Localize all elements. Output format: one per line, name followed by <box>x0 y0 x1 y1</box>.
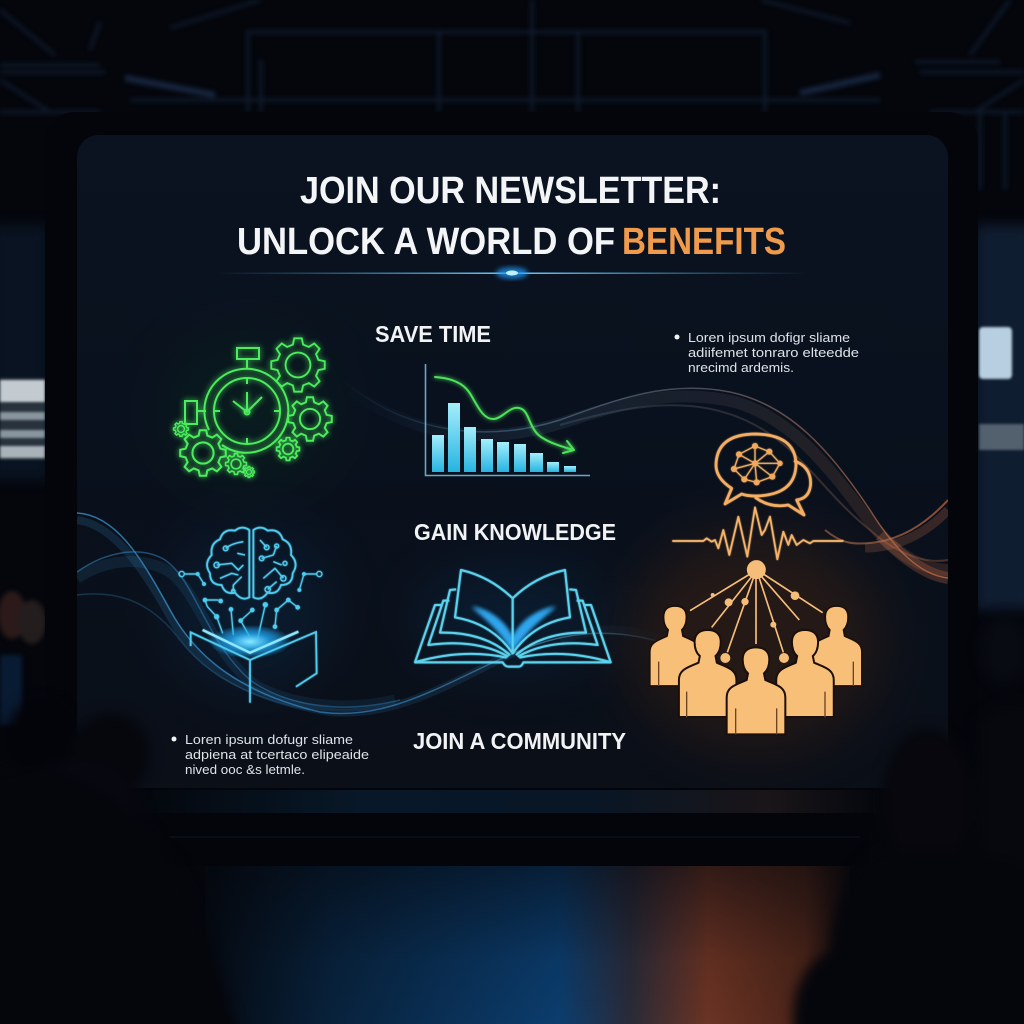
brain <box>207 528 296 599</box>
icon: stopwatch and gears <box>174 338 332 477</box>
text block: top right: Loren ipsum dofigr sliame <box>688 330 850 345</box>
chat bubbles <box>716 434 811 515</box>
gears <box>271 338 325 392</box>
left side display <box>0 378 45 460</box>
network hub <box>690 561 823 663</box>
heading: join a community: JOIN A COMMUNITY <box>413 728 626 754</box>
bars <box>432 403 576 472</box>
floor shading <box>205 866 850 1024</box>
people <box>650 606 862 734</box>
person: back right <box>811 606 862 686</box>
text block: bottom left: adpiena at tcertaco elipeaide <box>185 747 369 762</box>
stage platform <box>140 790 880 866</box>
icon: community chat and network <box>650 434 862 734</box>
icon: brain over open box <box>179 528 322 703</box>
trend arrow <box>435 377 574 453</box>
person: middle left <box>679 630 736 717</box>
arm lines <box>659 662 853 734</box>
text block: bottom left <box>172 732 369 777</box>
stopwatch <box>185 348 288 453</box>
title <box>237 170 786 263</box>
audience silhouettes: left <box>0 700 240 1024</box>
ambient glows <box>165 335 880 750</box>
panel: main screen <box>77 135 948 788</box>
text block: top right: adiifemet tonraro elteedde <box>688 345 859 360</box>
title line 2: UNLOCK A WORLD OF <box>237 221 615 263</box>
blue wave <box>77 513 670 714</box>
text block: top right <box>674 330 859 375</box>
bullet <box>172 736 176 742</box>
waveform <box>672 507 843 559</box>
title highlight: BENEFITS <box>622 221 786 263</box>
text block: bottom left: Loren ipsum dofugr sliame <box>185 732 353 747</box>
overhead lighting truss <box>0 0 1024 190</box>
flowing waves <box>77 378 948 714</box>
person: middle right <box>776 630 834 717</box>
orange wave <box>340 378 948 578</box>
side wall panel: right <box>975 225 1024 610</box>
title divider <box>215 267 810 279</box>
book glow <box>472 607 556 650</box>
right side display <box>979 327 1024 450</box>
text block: top right: nrecimd ardemis. <box>688 360 794 375</box>
chart axes <box>426 364 590 476</box>
bullet <box>674 334 680 340</box>
heading: save time: SAVE TIME <box>375 321 491 347</box>
stage floor <box>205 866 850 1024</box>
person: front <box>727 647 785 734</box>
screen frame <box>45 112 978 790</box>
open box <box>191 625 317 703</box>
network in bubble <box>731 443 783 485</box>
side wall panel: left <box>0 225 50 480</box>
bar chart: declining time <box>426 364 590 476</box>
pages <box>455 570 570 653</box>
person: back left <box>650 606 700 686</box>
audience silhouettes: right <box>793 616 1024 1024</box>
circuit lines <box>179 571 322 640</box>
distant audience left <box>0 591 46 725</box>
heading: gain knowledge: GAIN KNOWLEDGE <box>414 519 616 545</box>
title line 1: JOIN OUR NEWSLETTER: <box>300 170 721 212</box>
icon: open book <box>415 570 611 667</box>
text block: bottom left: nived ooc &s letmle. <box>185 762 305 777</box>
